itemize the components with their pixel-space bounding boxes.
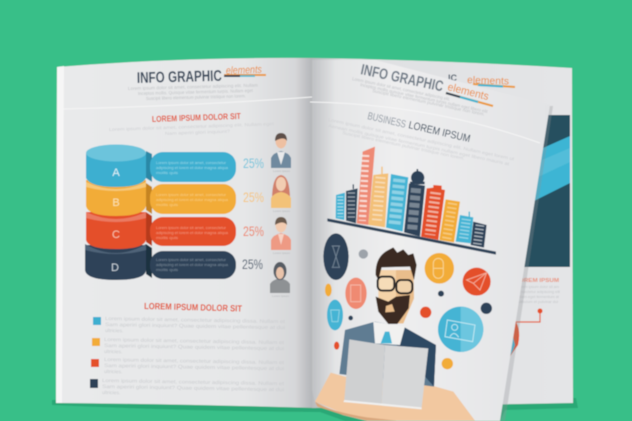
list item blue xyxy=(93,316,286,334)
layer D: adipiscing et lorem et dolor magna aliqua xyxy=(156,263,228,267)
list item yellow: ultricies. xyxy=(104,349,122,355)
intro text: Lorem ipsum dolor sit amet, consectetur adipiscing elit. Nullam xyxy=(128,83,258,91)
dot grey xyxy=(359,249,368,259)
layer B: adipiscing et lorem et dolor magna aliqua xyxy=(156,198,228,202)
building 7 xyxy=(421,185,445,240)
layer C: mollis quis xyxy=(156,236,178,240)
building 10 xyxy=(471,222,487,248)
layer A: mollis quis xyxy=(156,171,178,175)
back title fragment xyxy=(448,73,515,87)
icon: person D xyxy=(270,262,290,298)
back text block: OREM IPSUM xyxy=(519,278,559,284)
percentages: 25% xyxy=(243,156,264,171)
layer D: Lorem ipsum dolor sit amet, consectetur xyxy=(156,258,227,262)
title: info graphic: INFO GRAPHIC xyxy=(137,68,222,87)
layer C xyxy=(86,212,236,249)
city base xyxy=(327,218,496,255)
back text block: Lorem ipsum dolor sit am xyxy=(517,284,560,289)
list item red: ultricies. xyxy=(104,369,122,375)
icon circle: cup xyxy=(327,300,343,330)
heading: business lorem ipsum: BUSINESS xyxy=(366,110,407,131)
front intro text: Suscipit libero elementum pulvinar tristique non lorem. xyxy=(372,88,485,117)
desk xyxy=(315,373,475,421)
book shadow xyxy=(52,398,578,421)
list item navy xyxy=(90,378,285,396)
list item red: Lorem ipsum dolor sit amet, consectetur adipiscing dissa. Nullam et xyxy=(104,357,285,366)
small dots xyxy=(334,291,492,369)
back chart fragment and connector xyxy=(505,308,542,362)
book xyxy=(343,339,428,409)
icon circle: id card xyxy=(438,307,483,352)
panel: front sheet xyxy=(310,60,553,421)
icon: person C: Lorem Ipsum xyxy=(273,251,291,255)
intro text: Suscipit libero elementum pulvinar tristique non lorem. xyxy=(146,93,246,101)
illustration: man and icons xyxy=(315,233,492,421)
back title fragment: IC xyxy=(448,73,458,83)
list xyxy=(90,316,286,396)
title: front info graphic: elements xyxy=(446,81,490,103)
layer C: Lorem ipsum dolor sit amet, consectetur xyxy=(156,226,227,230)
layer D: mollis quis xyxy=(156,268,178,272)
icon: person A: Lorem Ipsum xyxy=(273,169,291,173)
list item blue: ultricies. xyxy=(105,328,123,334)
subheading text: Lorem ipsum dolor sit amet, consectetur adipiscing elit. Nullam eget xyxy=(109,121,275,132)
intro text: Inceptos mollis. Quisque vitae fermentum turpis. Nullam eget xyxy=(138,88,254,96)
heading: business lorem ipsum xyxy=(366,110,471,145)
layer D: D xyxy=(111,262,119,274)
percentages: 25% xyxy=(242,257,263,272)
front body text xyxy=(328,117,516,167)
back text block xyxy=(514,278,561,304)
dot yellow xyxy=(325,284,332,296)
back text block: vestibulum et pulvinar dui xyxy=(514,299,558,304)
front body text: Lorem ipsum dolor sit amet, consectetur adipiscing elit. Nullam eget lorem ut xyxy=(328,117,516,162)
neck and head xyxy=(376,247,417,324)
percentages xyxy=(242,156,264,272)
percentages: 25% xyxy=(243,190,264,205)
layer B xyxy=(86,180,236,216)
layer A xyxy=(86,144,236,187)
heading: second section: LOREM IPSUM DOLOR SIT xyxy=(144,301,243,314)
list item yellow xyxy=(92,337,285,355)
icon circle: hourglass xyxy=(323,233,349,280)
layer A: adipiscing et lorem et dolor magna aliqua xyxy=(156,166,228,170)
building 1 xyxy=(336,193,345,220)
intro text xyxy=(128,83,258,101)
list item red xyxy=(91,357,285,375)
panel: left page xyxy=(56,58,316,408)
layer A: Lorem ipsum dolor sit amet, consectetur xyxy=(156,161,227,165)
icon: person D: Lorem Ipsum xyxy=(272,294,290,298)
building 4 xyxy=(368,167,388,227)
suit xyxy=(339,322,436,387)
icon: person B xyxy=(271,175,291,213)
heading: lorem ipsum dolor sit: LOREM IPSUM DOLOR SIT xyxy=(152,111,242,124)
back text block: consectetur adipiscing elit xyxy=(516,289,561,294)
list item navy: Sam aperiri glori inquiunt? Quae quidem vitae pellentesque at dui xyxy=(102,384,284,393)
title: info graphic: elements xyxy=(226,64,263,77)
layer B: B xyxy=(112,197,120,209)
layer A: A xyxy=(112,167,120,179)
layer B: Lorem ipsum dolor sit amet, consectetur xyxy=(156,193,227,197)
heading: business lorem ipsum: LOREM IPSUM xyxy=(407,119,471,145)
illustration: city skyline xyxy=(327,147,496,255)
panel: right back page xyxy=(312,58,573,408)
front body text: Suscipit libero elementum pulvinar tristique non lorem. xyxy=(342,130,465,161)
list item yellow: Lorem ipsum dolor sit amet, consectetur adipiscing dissa. Nullam et xyxy=(104,337,285,346)
list item blue: Lorem ipsum dolor sit amet, consectetur adipiscing dissa. Nullam et xyxy=(105,316,286,325)
title: front info graphic: INFO GRAPHIC xyxy=(359,61,445,95)
back panel: angled colour block xyxy=(521,115,570,267)
glasses xyxy=(378,277,412,293)
subheading text: Nam aperiri glori inquiunt? xyxy=(165,129,231,136)
desk edge xyxy=(315,402,397,421)
back title fragment: elements xyxy=(467,75,509,87)
building 9 xyxy=(456,212,473,243)
building 8 xyxy=(439,199,460,242)
percentages: 25% xyxy=(243,224,264,239)
building 2 xyxy=(346,184,358,223)
subheading text xyxy=(109,121,275,136)
layer B: mollis quis xyxy=(156,203,178,207)
chart: layered cylinder xyxy=(85,144,236,280)
front intro text: Inceptos mollis quisque vitae fermentum turpis nullam eget libero elit xyxy=(360,82,489,114)
layer D xyxy=(85,244,236,280)
building 6 xyxy=(404,169,425,237)
icon: person A xyxy=(271,133,291,173)
icon circle: document xyxy=(345,278,367,309)
layer C: adipiscing et lorem et dolor magna aliqua xyxy=(156,231,228,235)
list item red: Sam aperiri glori inquiunt? Quae quidem vitae pellentesque at dui xyxy=(104,363,284,372)
list item navy: Lorem ipsum dolor sit amet, consectetur adipiscing dissa. Nullam et xyxy=(102,378,285,387)
icon circle: capsule xyxy=(425,253,454,284)
icon: person C xyxy=(271,217,291,255)
building 5 xyxy=(386,174,408,232)
list item navy: ultricies. xyxy=(102,390,120,396)
list item yellow: Sam aperiri glori inquiunt? Quae quidem vitae pellentesque at dui xyxy=(104,343,284,352)
front intro text: Lorem ipsum dolor sit amet, consectetur adipiscing elit. xyxy=(352,76,451,102)
icon: person B: Lorem Ipsum xyxy=(273,209,291,213)
front body text: Aenean mollis quisque vitae fermentum turpis nullam eget libero mauris at xyxy=(328,123,511,167)
building 3 xyxy=(357,147,375,225)
list item blue: Sam aperiri glori inquiunt? Quae quidem vitae pellentesque at dui xyxy=(105,322,285,331)
layer C: C xyxy=(112,229,120,241)
back text block: Nullam eget fermentum at xyxy=(515,294,560,299)
icon circle: paper plane xyxy=(463,268,491,296)
